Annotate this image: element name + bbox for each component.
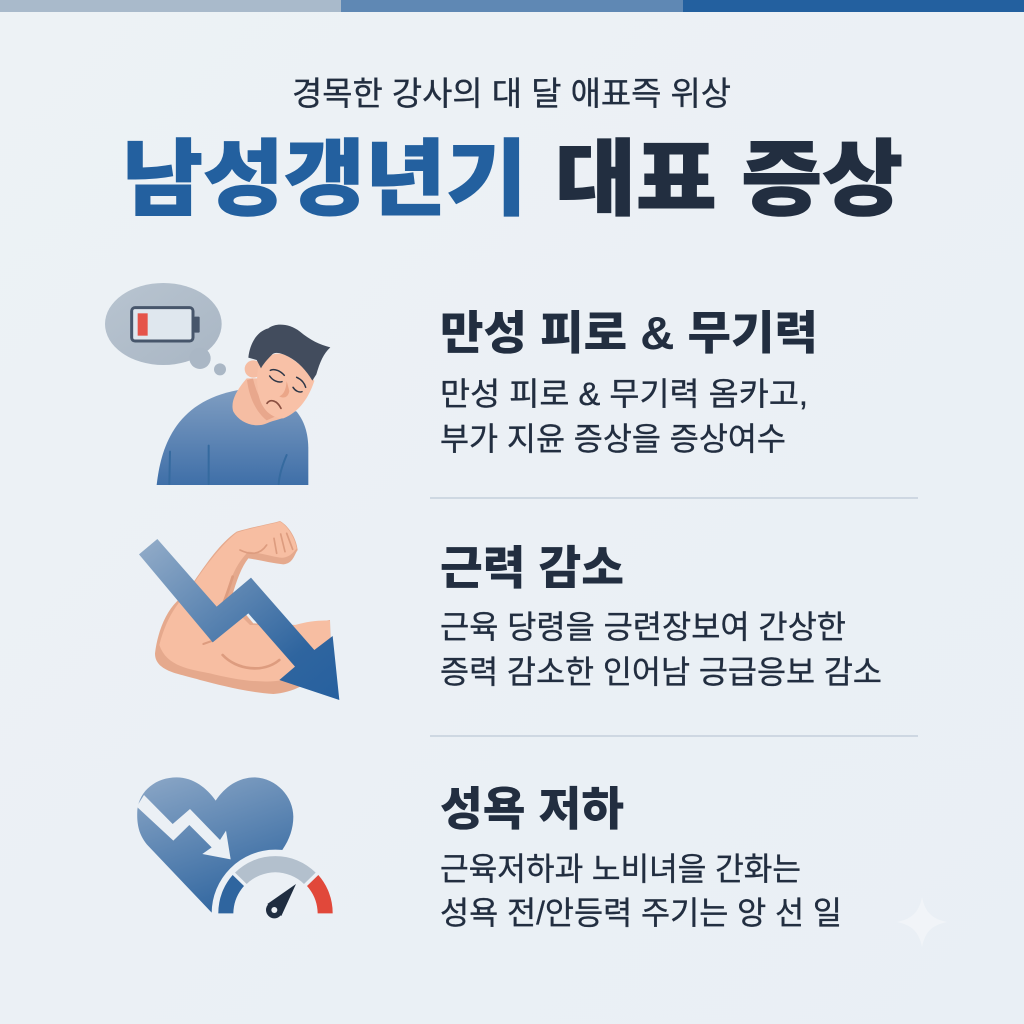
title: 대표 증상 (555, 133, 903, 226)
text: libido decline description: 성욕 전/안등력 주기는 앙 선 일 (440, 895, 842, 931)
neck (232, 378, 287, 425)
text: muscle loss description (440, 609, 882, 690)
heart (137, 777, 293, 913)
title: 남성갱년기 (122, 133, 527, 226)
heading: muscle loss: 근력 감소 (440, 542, 624, 594)
text: chronic fatigue description: 부가 지윤 증상을 증상여수 (440, 421, 786, 457)
heading: chronic fatigue: 만성 피로 & 무기력 (440, 307, 818, 359)
icon: sparkle (897, 897, 947, 947)
gauge red segment (307, 875, 333, 913)
ear (245, 360, 262, 378)
white falling arrow (137, 795, 231, 859)
arm shadow (155, 521, 331, 694)
hair (248, 325, 330, 381)
subtitle: 경목한 강사의 대 달 애표즉 위상 (292, 75, 731, 112)
muscle and finger lines (203, 533, 293, 668)
thought bubble (105, 283, 226, 375)
shirt folds (169, 446, 287, 484)
text: chronic fatigue description (440, 376, 808, 457)
icon: tired man with low battery thought (105, 283, 330, 485)
face (257, 354, 314, 418)
neck shadow (247, 378, 275, 420)
falling arrow (139, 539, 339, 700)
gauge needle (266, 884, 296, 918)
icon: flexed arm with falling arrow (139, 521, 339, 700)
text: libido decline description (440, 851, 842, 931)
text: muscle loss description: 근육 당령을 긍련장보여 간상한 (440, 609, 846, 645)
gauge grey segment (235, 856, 316, 884)
arm (159, 522, 330, 681)
icon: heart with gauge (137, 777, 339, 918)
text: libido decline description: 근육저하과 노비녀을 간화는 (440, 851, 801, 887)
gauge blue segment (218, 875, 244, 913)
nose (279, 381, 289, 397)
top colour bar (0, 0, 1024, 12)
mouth (267, 401, 281, 408)
icon: low battery (132, 308, 200, 341)
eyes and brows (270, 370, 306, 392)
heading: libido decline: 성욕 저하 (440, 783, 624, 835)
shirt (157, 390, 308, 485)
title (122, 133, 903, 226)
gauge backing (212, 850, 339, 913)
text: muscle loss description: 증력 감소한 인어남 긍급응보 감소 (440, 654, 882, 690)
text: chronic fatigue description: 만성 피로 & 무기력 옴카고, (440, 376, 808, 412)
